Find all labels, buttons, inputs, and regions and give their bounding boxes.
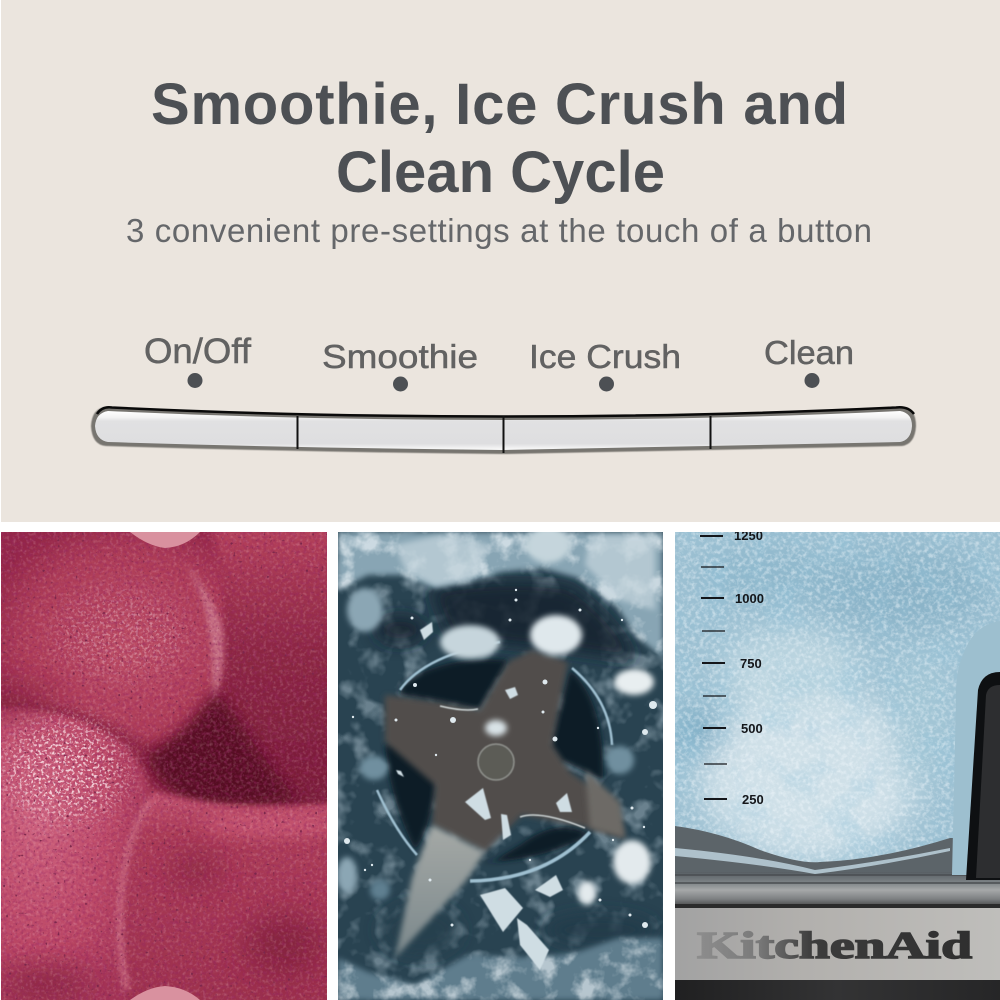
ice foam texture	[734, 670, 880, 850]
label: On/Off: On/Off	[144, 332, 251, 371]
dark well behind ice rim	[375, 581, 655, 955]
lower-right scoop	[120, 790, 340, 1000]
photo: blender jar with measuring scale	[675, 528, 1000, 1000]
glistening highlights	[3, 720, 127, 820]
label: Smoothie: Smoothie	[322, 338, 478, 375]
button bar	[91, 407, 916, 454]
black base	[675, 980, 1000, 1000]
label: Ice Crush: Ice Crush	[529, 338, 681, 375]
photo: ice and blade	[337, 527, 663, 1000]
upper-right scoop, shaded	[210, 532, 327, 806]
tonal variation in ice	[676, 545, 990, 860]
measuring scale: 1000	[735, 591, 764, 606]
indicator dots	[188, 373, 820, 392]
surface grain	[0, 532, 327, 1000]
measuring scale: 1250	[734, 528, 763, 543]
lower-left scoop	[0, 708, 150, 1000]
blade hub	[478, 744, 514, 780]
control panel with button labels	[91, 332, 916, 454]
blurred ice chunks	[337, 527, 654, 905]
title: Smoothie, Ice Crush and	[151, 72, 848, 137]
dark seeds	[0, 532, 327, 1000]
pale band along right edge of hollow	[200, 813, 340, 837]
measuring scale: 750	[740, 656, 762, 671]
circular base ring	[377, 642, 612, 881]
lower bright arm of blade	[395, 825, 485, 958]
jar base shadow band	[675, 904, 1000, 908]
upper-left scoop	[0, 525, 240, 745]
pale ridge on upper scoop	[188, 568, 227, 698]
subtitle: 3 convenient pre-settings at the touch of a button	[126, 212, 872, 249]
deep hollow between scoops	[145, 690, 300, 807]
shaded patches	[0, 688, 325, 1000]
handle: glass surround	[952, 621, 1000, 875]
measuring scale: 500	[741, 721, 763, 736]
KitchenAid logo: KitchenAid	[697, 925, 972, 967]
photo: smoothie	[0, 525, 340, 1000]
crushed ice, top	[338, 532, 663, 658]
measuring scale	[700, 528, 764, 807]
dark openings around blade	[385, 659, 603, 862]
seam between lower scoops	[120, 800, 150, 990]
title: Clean Cycle	[336, 140, 665, 205]
background: cream header panel	[1, 0, 1000, 522]
crushed ice, bottom	[338, 938, 663, 1000]
sharp ice crystals	[396, 622, 572, 970]
title	[151, 72, 848, 205]
jar base glass	[675, 826, 1000, 908]
label: Clean: Clean	[764, 334, 854, 371]
handle: dark grip	[966, 672, 1000, 880]
blotchy blurred ice in water	[338, 532, 663, 1000]
pale rim notches	[130, 532, 200, 548]
ice flecks	[344, 589, 657, 928]
measuring scale: 250	[742, 792, 764, 807]
steel blade	[385, 650, 625, 958]
stainless steel base band	[675, 908, 1000, 980]
